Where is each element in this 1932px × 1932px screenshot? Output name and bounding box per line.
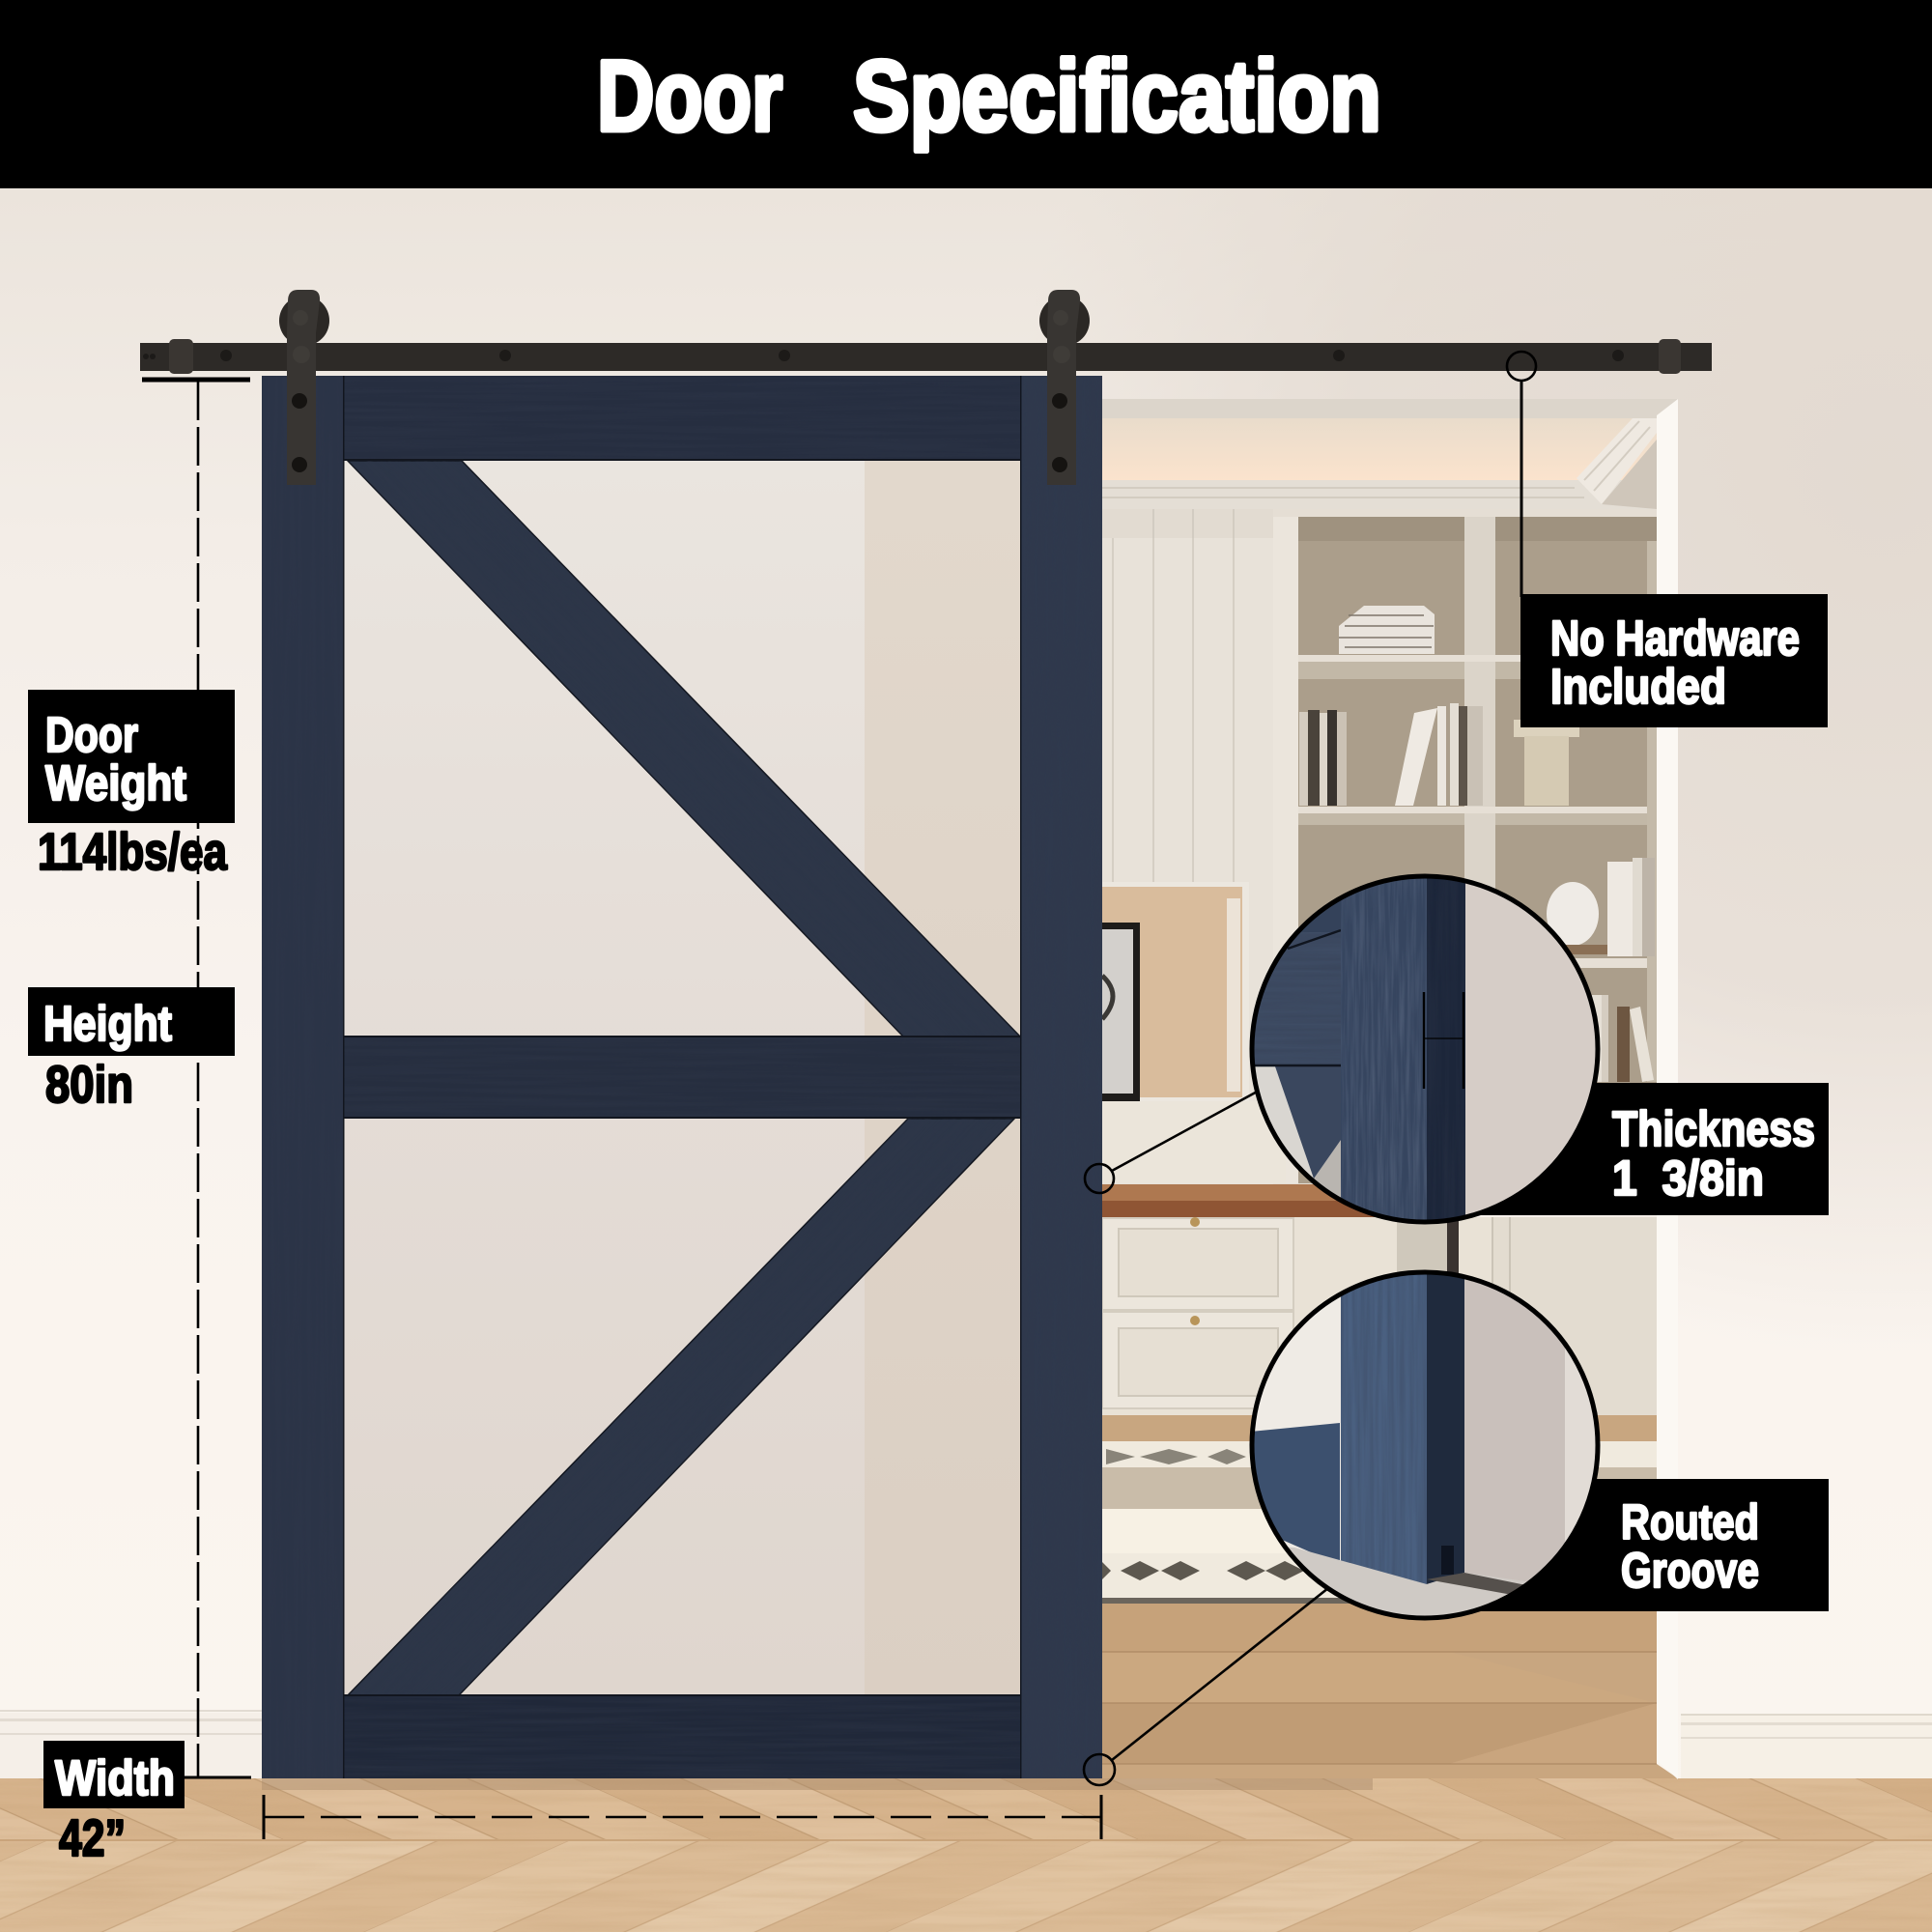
books row (1299, 710, 1347, 806)
label: no hardware: No Hardware (1550, 611, 1800, 666)
left hanger (279, 290, 329, 485)
title (597, 41, 1381, 153)
ceiling cove glow (1102, 418, 1657, 480)
room through the doorway (1101, 399, 1678, 1779)
title: Door (597, 41, 782, 153)
barn door (262, 376, 1102, 1778)
width dimension line (264, 1795, 1101, 1839)
label: routed groove: Routed (1621, 1494, 1759, 1549)
bookcase (1273, 509, 1657, 1185)
label: no hardware (1520, 594, 1828, 727)
baseboard left (0, 1710, 262, 1778)
right hanger (1039, 290, 1090, 485)
door bottom rail (344, 1694, 1020, 1778)
height dimension line (142, 380, 251, 1777)
label: door weight: Door (45, 707, 138, 762)
hardware rail (140, 339, 1712, 374)
label: routed groove (1478, 1479, 1829, 1611)
lower books (1592, 995, 1654, 1082)
value: height: 80in (45, 1056, 133, 1114)
no hardware callout line (1507, 352, 1536, 597)
detail circle: routed groove (1251, 1271, 1600, 1633)
framed art (1102, 882, 1249, 1101)
label: thickness: Thickness (1612, 1101, 1815, 1156)
door right stile (1020, 376, 1102, 1778)
groove callout line (1084, 1588, 1328, 1785)
label: thickness (1478, 1083, 1829, 1215)
right wall shading (966, 188, 1932, 1444)
wainscot panelling (1102, 509, 1273, 1185)
ceiling trim (1102, 399, 1678, 418)
sculpture (1514, 696, 1579, 806)
door diagonal lower (348, 1119, 1015, 1694)
title: Specification (853, 41, 1381, 153)
stacked books (1339, 606, 1435, 654)
lower cabinets (1102, 1217, 1657, 1415)
inner floor (1102, 1415, 1657, 1778)
label: no hardware: Included (1550, 659, 1726, 714)
left stop (169, 339, 193, 374)
foreground wood floor (0, 1778, 1932, 1932)
wood desk top (1102, 1184, 1392, 1217)
baseboard right (1681, 1714, 1932, 1778)
rug diamond pattern (1101, 1449, 1304, 1580)
leaning books (1395, 703, 1483, 806)
detail circle: thickness (1251, 875, 1599, 1231)
inner herringbone planks (1102, 1604, 1678, 1778)
label: height (28, 987, 235, 1056)
cabinet top (1102, 1101, 1286, 1183)
label: thickness: 1 3/8in (1612, 1151, 1764, 1206)
right stop (1659, 339, 1681, 374)
door glass panels (344, 461, 1021, 1697)
value: width: 42” (59, 1809, 126, 1867)
door top rail (344, 376, 1020, 461)
label: width: Width (55, 1750, 175, 1805)
crown moulding (1102, 418, 1657, 509)
rail bolts (143, 350, 1624, 361)
door diagonal upper (347, 461, 1020, 1036)
rug (1101, 1441, 1657, 1604)
label: routed groove: Groove (1621, 1543, 1759, 1598)
door jamb (1657, 399, 1678, 1779)
label: height: Height (43, 996, 172, 1051)
door left stile (262, 376, 344, 1778)
header bar (0, 0, 1932, 188)
value: door weight: 114lbs/ea (38, 823, 228, 881)
label: door weight (28, 690, 235, 823)
vase and books (1547, 858, 1655, 956)
label: door weight: Weight (45, 755, 186, 810)
thickness callout line (1085, 1090, 1261, 1193)
door middle rail (344, 1036, 1020, 1119)
